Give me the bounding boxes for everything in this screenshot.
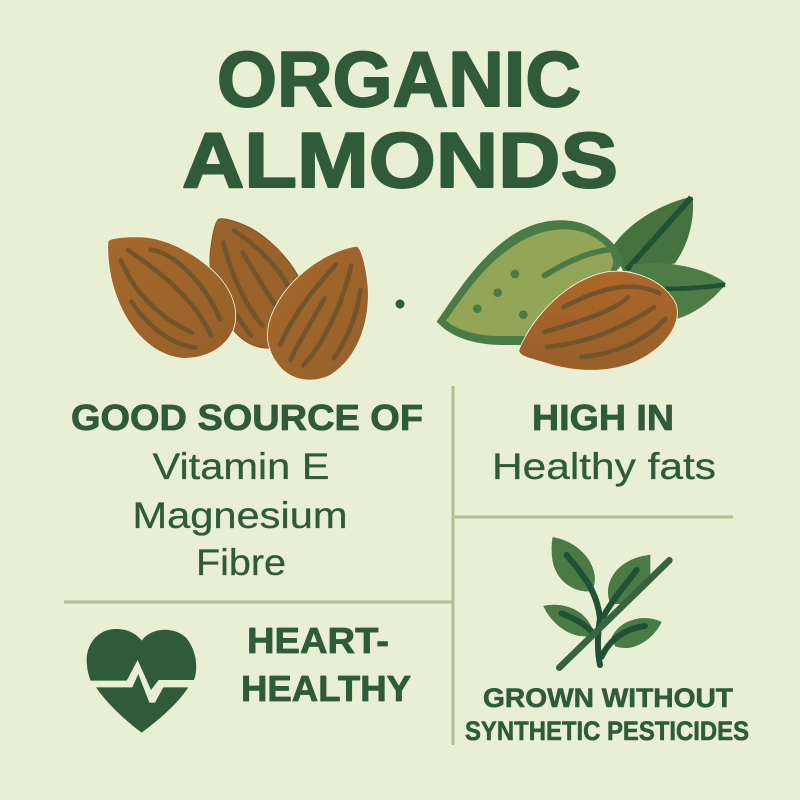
illustration: almond in green hull with leaves (437, 197, 726, 370)
heading: heart-healthy: HEALTHY (241, 668, 411, 709)
heading: heart-healthy (241, 620, 411, 709)
almond: left (108, 237, 235, 358)
heading: heart-healthy: HEART- (247, 620, 389, 661)
dividers (64, 386, 733, 745)
text block: high in (492, 397, 716, 487)
text block: good source of: Magnesium (132, 495, 348, 536)
text block: good source of: GOOD SOURCE OF (71, 397, 423, 438)
title (182, 35, 618, 204)
title: ORGANIC (217, 35, 581, 123)
text block: good source of: Fibre (196, 542, 286, 583)
almond: back (210, 219, 300, 348)
center dot (396, 300, 404, 308)
green hull (437, 220, 622, 345)
illustration: three almonds (108, 219, 368, 380)
icon: heart with pulse (87, 629, 196, 733)
text block: grown without synthetic pesticides: GROWN WITHOUT (483, 683, 734, 713)
title: ALMONDS (182, 116, 618, 204)
leaf: upper (613, 197, 693, 272)
almond: right (268, 247, 368, 380)
leaf: lower (630, 263, 726, 319)
text block: high in: Healthy fats (492, 446, 716, 487)
text block: good source of (71, 397, 423, 583)
text block: grown without synthetic pesticides: SYNTHETIC PESTICIDES (465, 716, 749, 746)
icon: plant branch crossed out (543, 537, 669, 668)
text block: grown without synthetic pesticides (465, 683, 749, 746)
almond: front (519, 272, 677, 370)
text block: good source of: Vitamin E (152, 446, 330, 487)
text block: high in: HIGH IN (532, 397, 674, 438)
